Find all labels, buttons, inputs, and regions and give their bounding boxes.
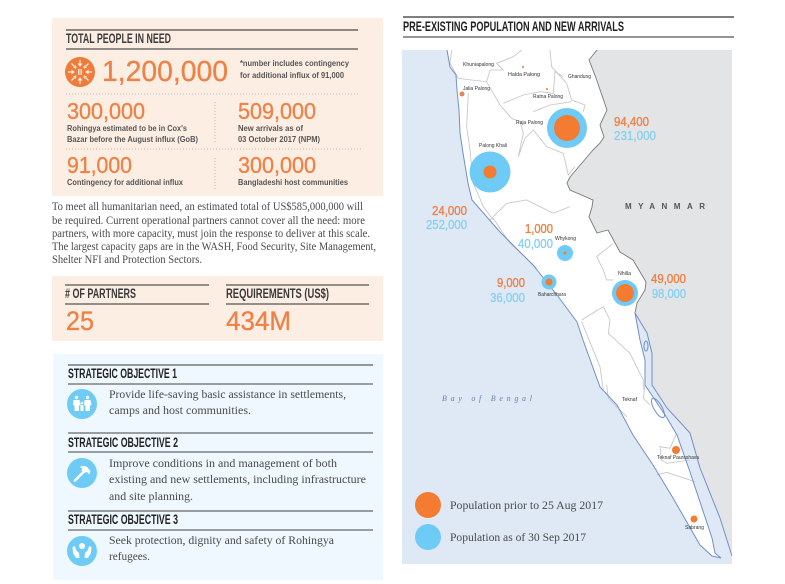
objective 3 <box>67 512 334 566</box>
country label: Myanmar: MYANMAR <box>625 202 705 211</box>
place labels: Teknaf <box>622 397 638 403</box>
place labels: Teknaf Paurashava <box>657 455 699 461</box>
objective 1: camps and host communities. <box>109 405 251 417</box>
legend <box>415 492 603 550</box>
place labels: Palong Khali <box>479 143 507 149</box>
icon: protecting hands <box>67 536 97 566</box>
marker: Baharchhara <box>542 274 556 290</box>
place labels: Whykong <box>555 236 576 242</box>
requirements stat: REQUIREMENTS (US$) <box>226 286 329 301</box>
text block: funding paragraph: Shelter NFI and Protection Sectors. <box>52 254 202 266</box>
Myanmar territory <box>567 50 732 556</box>
values: Raja Palong: 94,400 <box>614 115 649 129</box>
text block: funding paragraph: The largest capacity gaps are in the WASH, Food Security, Site Management, <box>52 241 376 253</box>
total figure: 1,200,000 <box>102 56 228 88</box>
values: Palong Khali: 24,000 <box>432 204 467 218</box>
stat: 300,000 Rohingya <box>67 98 198 144</box>
admin boundaries <box>450 50 695 482</box>
values: Raja Palong <box>614 115 656 143</box>
objective 2: STRATEGIC OBJECTIVE 2 <box>68 435 178 450</box>
contingency note <box>240 59 350 80</box>
marker: Raja Palong <box>547 108 587 148</box>
map panel <box>402 50 732 564</box>
values: Nhilla: 49,000 <box>651 272 686 286</box>
stat: 300,000 Rohingya: 300,000 <box>67 98 145 124</box>
stat: 300,000 host communities: 300,000 <box>238 152 316 178</box>
partners stat <box>65 286 136 336</box>
requirements stat <box>226 286 329 336</box>
panel: partners and requirements <box>52 276 383 341</box>
place labels: Halda Palong <box>508 72 540 78</box>
objective 1 <box>67 366 346 419</box>
marker: Palong Khali <box>470 152 510 192</box>
objective 3: STRATEGIC OBJECTIVE 3 <box>68 512 178 527</box>
objective 3: refugees. <box>109 551 150 563</box>
stat: 91,000 contingency: 91,000 <box>67 152 132 178</box>
legend: Population prior to 25 Aug 2017 <box>450 500 603 512</box>
stat: 509,000 new arrivals: 03 October 2017 (NPM) <box>238 135 320 144</box>
stat: 300,000 Rohingya: Bazar before the August influx (GoB) <box>67 135 198 144</box>
objective 2: Improve conditions in and management of both <box>109 458 337 470</box>
icon: family <box>67 389 97 419</box>
objective 3: Seek protection, dignity and safety of Rohingya <box>109 535 334 547</box>
stat: 300,000 host communities <box>238 152 349 187</box>
heading: total people in need: TOTAL PEOPLE IN NEED <box>66 31 171 46</box>
place labels: Jalia Palong <box>463 86 490 92</box>
place labels: Ghandung <box>568 74 591 80</box>
objective 2: existing and new settlements, including infrastructure <box>109 474 366 486</box>
panel: strategic objectives <box>53 354 383 580</box>
text block: funding paragraph: be required. Current operational partners cannot cover all the need: more <box>52 215 365 227</box>
partners stat: 25 <box>66 306 94 336</box>
objective 1: Provide life-saving basic assistance in settlements, <box>109 389 346 401</box>
sea label: Bay of Bengal: Bay of Bengal <box>442 394 533 403</box>
text block: funding paragraph <box>52 200 376 266</box>
stat: 509,000 new arrivals <box>238 98 320 144</box>
values: Palong Khali: 252,000 <box>426 218 467 232</box>
values: Nhilla <box>651 272 686 301</box>
values: Baharchhara <box>490 276 525 305</box>
place labels <box>463 62 704 531</box>
land <box>447 50 721 558</box>
text block: funding paragraph: To meet all humanitarian need, an estimated total of US$585,000,000 will <box>52 200 363 213</box>
requirements stat: 434M <box>226 306 291 336</box>
values: Raja Palong: 231,000 <box>614 129 656 143</box>
values: Whykong: 40,000 <box>518 237 553 251</box>
partners stat: # OF PARTNERS <box>65 286 136 301</box>
stat: 91,000 contingency <box>67 152 184 187</box>
icon: people converging <box>65 57 95 87</box>
icon: hammer <box>67 458 97 488</box>
stat: 509,000 new arrivals: 509,000 <box>238 98 316 124</box>
place labels: Khuniapalong <box>463 62 494 68</box>
stat: 300,000 Rohingya: Rohingya estimated to be in Cox's <box>67 124 187 133</box>
values: Palong Khali <box>426 204 467 232</box>
marker: Nhilla <box>612 280 638 306</box>
small markers <box>460 66 698 522</box>
stat: 91,000 contingency: Contingency for additional influx <box>67 178 184 187</box>
legend: Population as of 30 Sep 2017 <box>450 532 586 544</box>
heading: pre-existing population and new arrivals: PRE-EXISTING POPULATION AND NEW ARRIVALS <box>403 18 624 34</box>
objective 1: STRATEGIC OBJECTIVE 1 <box>68 366 177 381</box>
place labels: Ratna Palong <box>533 94 563 100</box>
values: Whykong: 1,000 <box>525 222 553 236</box>
contingency note: for additional influx of 91,000 <box>240 71 345 80</box>
text block: funding paragraph: partners, with more capacity, must join the response to deliver at this scale. <box>52 228 370 240</box>
Myanmar border <box>567 50 646 313</box>
values: Nhilla: 98,000 <box>652 287 686 301</box>
marker: Whykong <box>557 245 573 261</box>
stat: 509,000 new arrivals: New arrivals as of <box>238 124 303 133</box>
place labels: Sabrang <box>685 525 704 531</box>
values: Baharchhara: 9,000 <box>497 276 525 290</box>
panel: total people in need <box>52 18 383 196</box>
contingency note: *number includes contingency <box>240 59 350 68</box>
place labels: Nhilla <box>618 271 631 277</box>
objective 2: and site planning. <box>109 491 193 503</box>
values: Baharchhara: 36,000 <box>490 291 525 305</box>
place labels: Baharchhara <box>538 292 566 298</box>
values: Whykong <box>518 222 553 251</box>
objective 2 <box>67 435 366 503</box>
stat: 300,000 host communities: Bangladeshi host communities <box>238 178 349 187</box>
sea <box>402 50 732 564</box>
place labels: Raja Palong <box>516 120 543 126</box>
coastline and river <box>447 50 732 558</box>
